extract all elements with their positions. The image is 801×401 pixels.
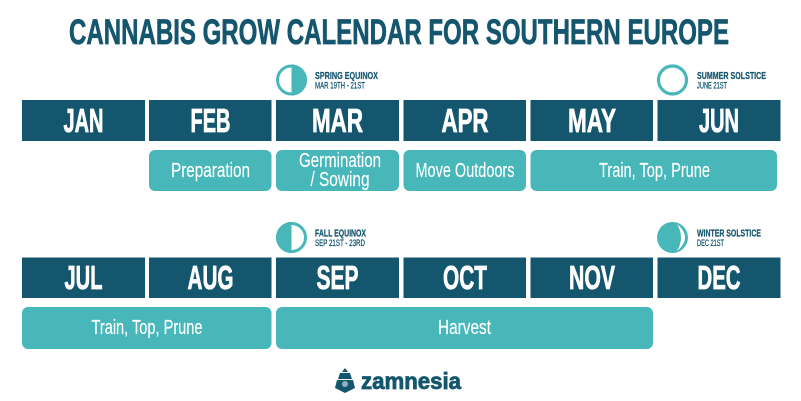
label: spring equinox: SPRING EQUINOX <box>315 70 378 82</box>
month: APR <box>404 100 526 141</box>
label: spring equinox: MAR 19TH - 21ST <box>315 80 365 92</box>
activity: train top prune <box>22 307 272 349</box>
icon: spring equinox moon <box>278 64 307 96</box>
icon: winter solstice moon <box>657 222 688 253</box>
month: MAR <box>276 100 399 141</box>
month: OCT <box>404 258 526 298</box>
activity: train top prune: Train, Top, Prune <box>92 317 202 339</box>
activity: harvest <box>276 307 653 349</box>
label: spring equinox <box>315 70 378 92</box>
label: fall equinox <box>315 228 366 249</box>
icon: fall equinox moon <box>276 222 306 253</box>
label: summer solstice: JUNE 21ST <box>697 80 727 92</box>
icon: zamnesia emblem <box>335 368 355 393</box>
label: winter solstice <box>697 228 761 249</box>
month: NOV: NOV <box>569 259 615 296</box>
month: JUL: JUL <box>64 259 102 296</box>
month: JUL <box>22 258 145 298</box>
month: NOV <box>530 258 653 298</box>
activities row 2 <box>22 307 653 349</box>
activities row 1 <box>149 150 777 191</box>
label: fall equinox: FALL EQUINOX <box>315 228 366 240</box>
wordmark: zamnesia <box>361 368 461 394</box>
month: OCT: OCT <box>443 259 487 296</box>
activity: germination / sowing: / Sowing <box>310 169 370 191</box>
activity: train top prune: Train, Top, Prune <box>599 160 710 182</box>
month: APR: APR <box>442 102 489 139</box>
month: AUG <box>149 258 272 298</box>
month: FEB <box>149 100 272 141</box>
activity: harvest: Harvest <box>438 317 491 339</box>
activity: move outdoors: Move Outdoors <box>416 160 514 182</box>
activity: preparation <box>149 150 272 191</box>
label: winter solstice: DEC 21ST <box>697 238 724 249</box>
activity: move outdoors <box>404 150 526 191</box>
month: SEP: SEP <box>316 259 358 296</box>
icon: summer solstice moon <box>658 66 686 94</box>
activity: germination / sowing: Germination <box>299 150 381 172</box>
month: MAY <box>530 100 653 141</box>
month: SEP <box>276 258 399 298</box>
activity: germination / sowing <box>276 150 399 191</box>
month: DEC: DEC <box>698 259 740 296</box>
month: AUG: AUG <box>188 259 234 296</box>
month: MAY: MAY <box>568 102 616 139</box>
label: fall equinox: SEP 21ST - 23RD <box>315 238 365 249</box>
months row 1 <box>22 100 780 141</box>
months row 2 <box>22 258 780 298</box>
logo: zamnesia <box>335 368 461 394</box>
month: FEB: FEB <box>190 102 230 139</box>
month: DEC <box>658 258 780 298</box>
month: MAR: MAR <box>312 102 363 139</box>
label: summer solstice: SUMMER SOLSTICE <box>697 70 766 82</box>
activity: train top prune <box>530 150 777 191</box>
month: JUN <box>658 100 780 141</box>
month: JUN: JUN <box>699 102 739 139</box>
activity: preparation: Preparation <box>171 160 250 182</box>
label: summer solstice <box>697 70 766 92</box>
month: JAN: JAN <box>64 102 104 139</box>
label: winter solstice: WINTER SOLSTICE <box>697 228 761 240</box>
month: JAN <box>22 100 145 141</box>
